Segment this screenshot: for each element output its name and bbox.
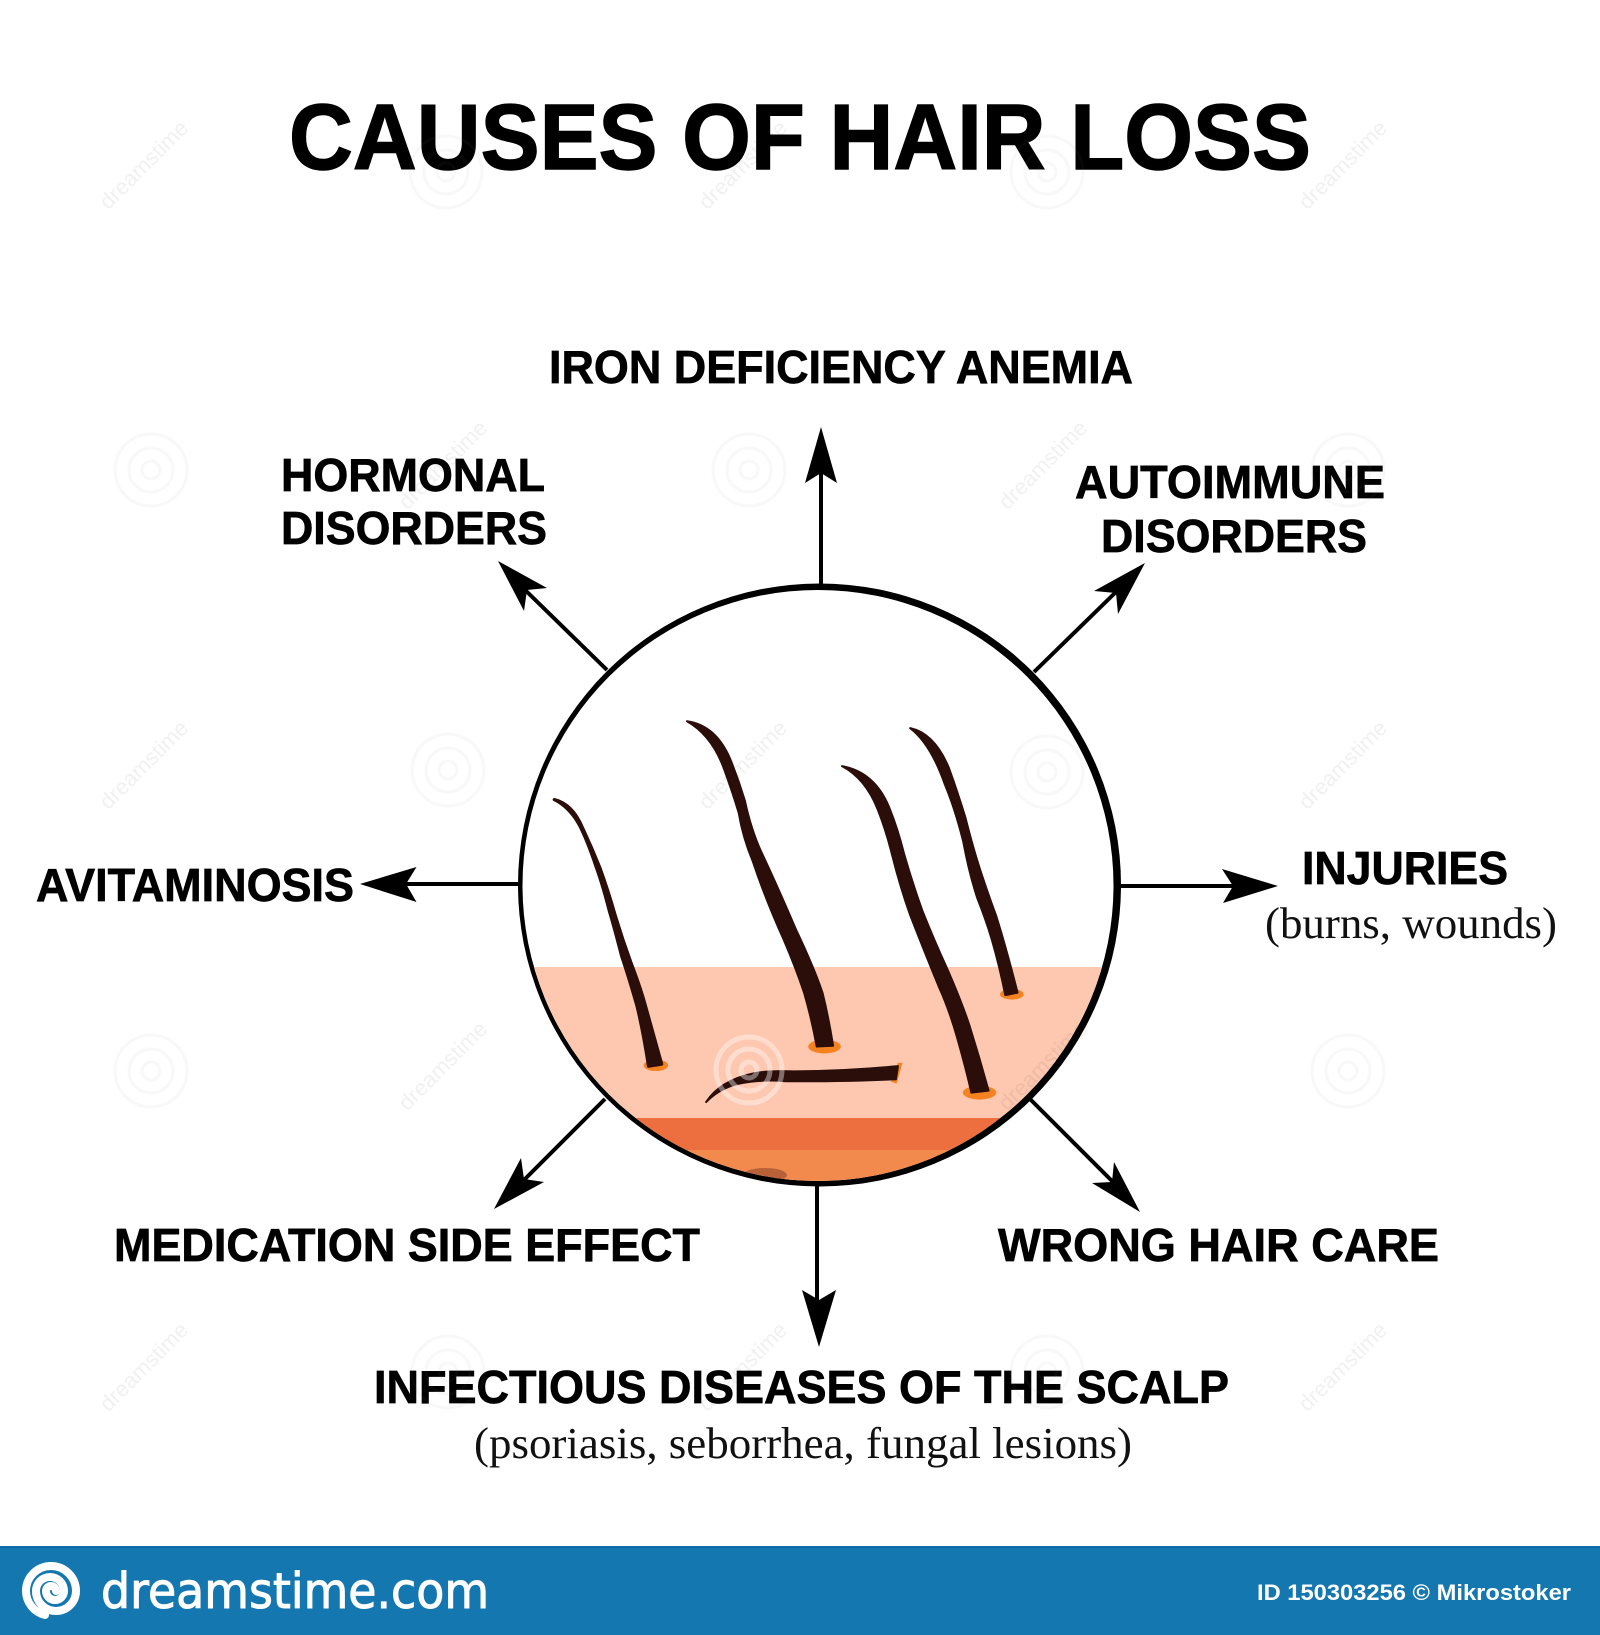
skin layers [534,967,1102,1181]
arrow: to injuries [1120,869,1278,903]
arrow: to avitaminosis [360,867,519,902]
label: medication side effect: MEDICATION SIDE EFFECT [114,1219,700,1271]
label: injuries: INJURIES [1302,842,1508,894]
label: avitaminosis: AVITAMINOSIS [36,859,354,911]
hair follicles [644,989,1024,1100]
watermark: dreamstime [393,1016,492,1115]
watermark: dreamstime [993,1016,1092,1115]
label: autoimmune disorders: AUTOIMMUNE [1075,456,1385,508]
logo wordmark: dreamstime.com [101,1563,489,1620]
arrow: to infectious diseases [802,1184,836,1347]
icon: dreamstime spiral logo [26,1566,76,1615]
hairs [554,721,1024,1102]
label: iron deficiency anemia: IRON DEFICIENCY ANEMIA [549,341,1133,393]
arrow: to medication side effect [494,1099,605,1209]
watermark [94,115,1392,1416]
title: CAUSES OF HAIR LOSS [289,85,1311,189]
watermark in scalp [716,1037,782,1103]
image id and credit: ID 150303256 © Mikrostoker [1257,1580,1571,1605]
watermark: dreamstime [94,115,193,214]
watermark: dreamstime [693,115,792,214]
label: infectious diseases of the scalp: INFECTIOUS DISEASES OF THE SCALP [374,1361,1229,1413]
arrow: to autoimmune disorders [1034,563,1145,672]
label: injuries: (burns, wounds) [1265,899,1557,948]
label: autoimmune disorders [1075,456,1385,562]
arrow: to iron deficiency anemia [805,427,837,586]
watermark: dreamstime [1293,715,1392,814]
watermark: dreamstime [393,415,492,514]
watermark: dreamstime [1293,115,1392,214]
watermark: dreamstime [94,1317,193,1416]
watermark: dreamstime [94,715,193,814]
watermark: dreamstime [993,415,1092,514]
label: hormonal disorders: HORMONAL [281,449,545,501]
label: infectious diseases of the scalp: (psoriasis, seborrhea, fungal lesions) [474,1419,1132,1468]
hair strands [554,721,1018,1102]
arrow: to hormonal disorders [498,561,607,670]
watermark: dreamstime [693,1317,792,1416]
label: wrong hair care: WRONG HAIR CARE [998,1219,1439,1271]
scalp circle [500,584,1140,1200]
footer bar [0,1546,1600,1635]
watermark: dreamstime [693,715,792,814]
watermark: dreamstime [1293,1317,1392,1416]
label: hormonal disorders [281,449,547,554]
label: hormonal disorders: DISORDERS [281,502,547,554]
arrow: to wrong hair care [1030,1099,1140,1212]
label: infectious diseases of the scalp [374,1361,1229,1468]
label: injuries [1265,842,1557,948]
label: autoimmune disorders: DISORDERS [1101,510,1367,562]
